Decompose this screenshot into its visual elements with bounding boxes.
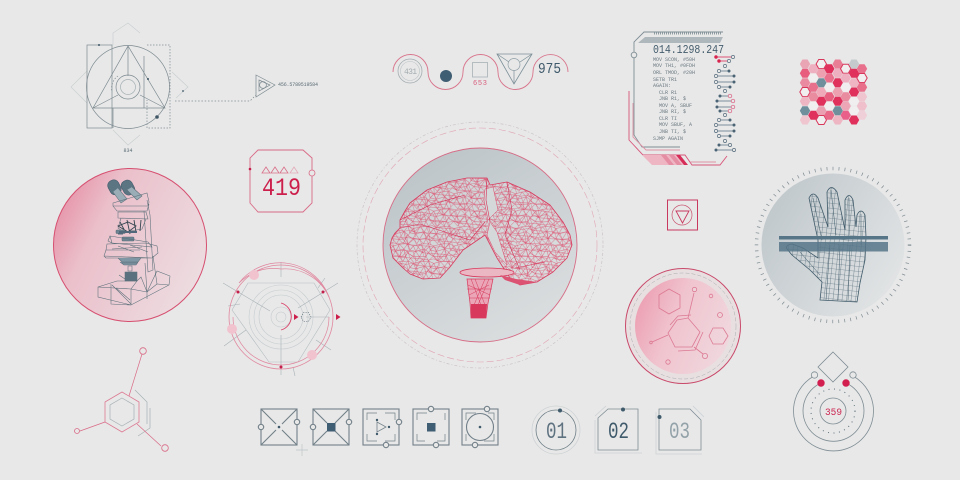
- dial 359: [794, 352, 874, 451]
- assembly listing: MOV TH1, #0FDH: [653, 63, 695, 69]
- figure number: 834: [123, 148, 133, 154]
- assembly listing: CLR TI: [659, 116, 677, 122]
- value badge 419: [249, 150, 315, 212]
- assembly listing: AGAIN:: [653, 83, 671, 89]
- assembly listing: SETB TR1: [653, 77, 677, 83]
- icon box 4: [413, 406, 449, 448]
- assembly listing: SJMP AGAIN: [653, 136, 683, 142]
- assembly listing: JNB RI, $: [659, 109, 686, 115]
- assembly listing: MOV A, SBUF: [659, 103, 692, 109]
- outer dashed rings: [357, 122, 603, 368]
- control icon row: [258, 406, 498, 456]
- small triangle marker: [256, 75, 275, 97]
- assembly listing: MOV SBUF, A: [659, 122, 692, 128]
- triangle button: [668, 200, 698, 230]
- panel frame: [629, 32, 727, 165]
- icon box 5: [462, 406, 498, 448]
- badge 03: [656, 406, 704, 454]
- wireframe hand: [786, 187, 866, 302]
- value badge 419: 419: [262, 174, 301, 203]
- sacred geometry diagram: [71, 23, 275, 145]
- assembly listing: ORL TMOD, #20H: [653, 70, 695, 76]
- assembly listing: CLR R1: [659, 90, 677, 96]
- hand scan disc: [756, 168, 910, 322]
- microscope: [98, 178, 170, 305]
- wave gauge: [393, 54, 568, 90]
- chemistry disc: [626, 268, 740, 384]
- assembly listing: JNB R1, $: [659, 96, 686, 102]
- tick ring: [756, 168, 910, 322]
- scan bars: [779, 236, 888, 252]
- wave gauge: 653: [473, 80, 487, 88]
- icon box 2: [310, 409, 352, 445]
- icon box 1: [258, 409, 300, 445]
- molecule: [650, 287, 728, 364]
- code panel: [629, 32, 736, 165]
- badge 01: 01: [546, 419, 567, 445]
- hexagon heat map: [800, 60, 867, 124]
- badge 01: [532, 406, 580, 454]
- assembly listing: MOV SCON, #50H: [653, 57, 695, 63]
- hexagon molecule: [74, 348, 168, 451]
- wave gauge: 431: [404, 68, 417, 77]
- cross mark: [296, 444, 308, 456]
- DNA ladder: [714, 55, 736, 152]
- wave gauge: 975: [538, 61, 561, 78]
- icon box 3: [363, 409, 402, 448]
- assembly listing: JNB TI, $: [659, 129, 686, 135]
- radar target: [223, 262, 340, 376]
- badge 03: 03: [669, 419, 690, 445]
- microscope disc: [54, 168, 206, 322]
- coordinate label: 456.5789519584: [278, 82, 318, 88]
- badge 02: [595, 406, 642, 453]
- dotted connector: [175, 95, 256, 101]
- wireframe brain: [385, 175, 575, 318]
- dial 359: 359: [825, 407, 842, 419]
- panel number: 014.1298.247: [653, 43, 724, 57]
- badge 02: 02: [608, 419, 629, 445]
- brain stem: [460, 268, 537, 318]
- brain disc: [357, 122, 603, 368]
- assembly listing: [653, 57, 695, 142]
